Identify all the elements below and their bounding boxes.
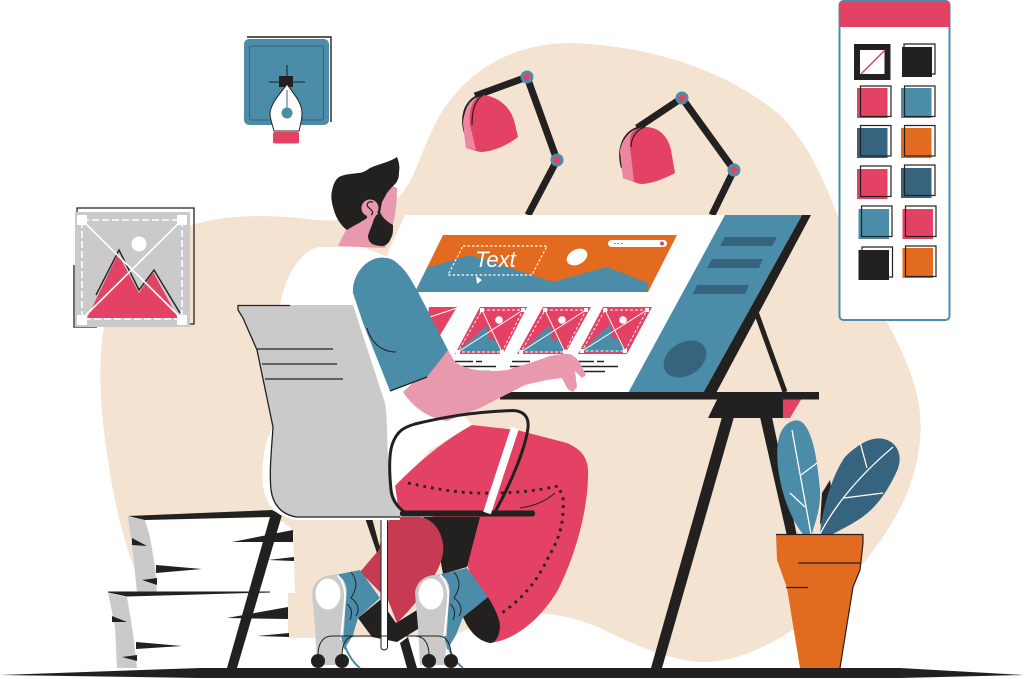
trousers: far leg	[393, 425, 588, 643]
web layout banner	[415, 235, 677, 292]
man: arm and hand	[403, 350, 586, 421]
chair pole	[381, 517, 388, 650]
trousers: black inner	[423, 517, 480, 574]
socks	[335, 568, 488, 650]
background blob	[100, 43, 921, 662]
floor line	[0, 668, 1024, 678]
desk top bar and clamp	[500, 392, 819, 418]
man: body	[280, 247, 588, 668]
trousers: stitching	[408, 483, 563, 613]
thumbnail 4	[578, 307, 652, 354]
ear	[362, 200, 378, 216]
chair arm rest	[390, 410, 528, 514]
flower pot	[776, 534, 863, 668]
thumbnail 3	[517, 307, 591, 354]
leaf: right	[820, 438, 900, 534]
icon: image placeholder card	[74, 208, 194, 327]
pink clamp	[783, 398, 802, 418]
desk lamp: left	[463, 70, 564, 215]
beard	[368, 212, 393, 246]
man: neck, head and beard	[331, 157, 399, 248]
desk legs	[651, 417, 797, 668]
desk lamp: right	[620, 92, 740, 215]
shirt	[280, 247, 472, 517]
web layout banner: Text	[475, 247, 517, 272]
chair seat back	[238, 305, 402, 520]
back rest lines	[257, 349, 343, 379]
thumbnail captions	[455, 362, 618, 372]
man: blue sleeve	[353, 258, 448, 391]
chair seat bar	[400, 510, 535, 516]
wheel arcs	[318, 636, 451, 655]
blue side panel	[627, 215, 802, 395]
paper stacks	[108, 510, 296, 668]
trousers: near leg	[360, 517, 443, 623]
shoe: right	[415, 575, 463, 668]
drafting desk	[353, 215, 819, 668]
chair legs	[227, 510, 417, 668]
panel: colour palette	[840, 1, 950, 320]
board support strut	[755, 309, 785, 392]
white chair edge	[262, 427, 400, 520]
grey back rest	[238, 305, 402, 517]
boots soles	[358, 597, 500, 643]
shoe: left	[312, 575, 360, 668]
icon: pen tool card	[244, 37, 331, 144]
thumbnail 1	[425, 307, 457, 342]
black board edge	[702, 215, 811, 395]
wheels	[311, 654, 458, 668]
plant in pot	[776, 420, 900, 668]
thumbnail 2	[455, 307, 527, 354]
chair base and wheels	[227, 510, 458, 668]
leaf: left	[777, 420, 820, 534]
hair	[331, 157, 399, 230]
neck and face	[338, 180, 397, 248]
white drawing board	[353, 215, 726, 395]
